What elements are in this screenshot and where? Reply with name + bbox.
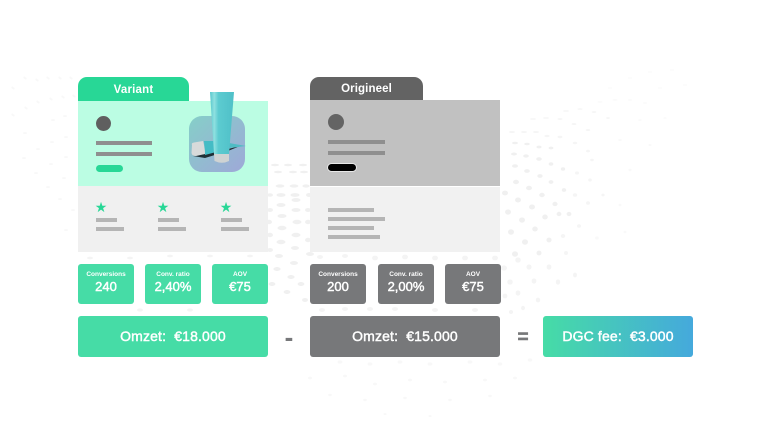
omzet origineel (310, 316, 500, 357)
label: AOV (466, 271, 480, 278)
label: Conv. ratio (156, 271, 190, 278)
stat: origineel aov (445, 264, 501, 304)
stat: origineel conversion ratio (378, 264, 434, 304)
dgc fee result (543, 316, 693, 357)
label: Conv. ratio (389, 271, 423, 278)
stat: variant aov (212, 264, 268, 304)
text line (328, 140, 385, 144)
call to action button (96, 165, 123, 172)
text line (328, 226, 374, 230)
origineel mockup bottom (310, 187, 500, 252)
variant tab (78, 77, 189, 101)
origineel mockup top (310, 100, 500, 186)
panel: origineel (310, 77, 500, 252)
omzet variant (78, 316, 268, 357)
text line (96, 152, 152, 156)
value: 2,00% (388, 279, 424, 294)
text line (96, 141, 152, 145)
value: €75 (462, 279, 484, 294)
star column 1 (95, 199, 124, 231)
variant tab: Variant (114, 84, 153, 96)
icon: product tube (189, 92, 246, 172)
stat: origineel conversions (310, 264, 366, 304)
dgc fee result: DGC fee: €3.000 (562, 328, 674, 344)
star: ★ (95, 199, 107, 215)
variant mockup top (78, 101, 268, 186)
value: 2,40% (155, 279, 191, 294)
equals sign: = (517, 327, 529, 348)
line (96, 227, 124, 231)
omzet origineel: Omzet: €15.000 (352, 328, 458, 344)
variant mockup bottom (78, 186, 268, 252)
avatar circle (96, 116, 111, 131)
star: ★ (157, 199, 169, 215)
text line (328, 208, 374, 212)
text line (328, 217, 385, 221)
line (96, 218, 117, 222)
omzet variant: Omzet: €18.000 (120, 328, 226, 344)
star column 3 (220, 199, 249, 231)
value: 200 (327, 279, 349, 294)
star column 2 (157, 199, 186, 231)
line (158, 218, 179, 222)
minus sign: - (285, 322, 293, 352)
line (221, 218, 242, 222)
label: Conversions (86, 271, 126, 278)
panel: variant (78, 77, 268, 252)
line (221, 227, 249, 231)
line (158, 227, 186, 231)
label: AOV (233, 271, 247, 278)
call to action button (328, 164, 356, 171)
avatar circle (328, 114, 344, 130)
text line (328, 235, 380, 239)
origineel tab (310, 77, 423, 100)
label: Conversions (318, 271, 358, 278)
stat: variant conversions (78, 264, 134, 304)
star: ★ (220, 199, 232, 215)
text line (328, 151, 385, 155)
value: €75 (229, 279, 251, 294)
stat: variant conversion ratio (145, 264, 201, 304)
value: 240 (95, 279, 117, 294)
origineel tab: Origineel (341, 83, 392, 95)
